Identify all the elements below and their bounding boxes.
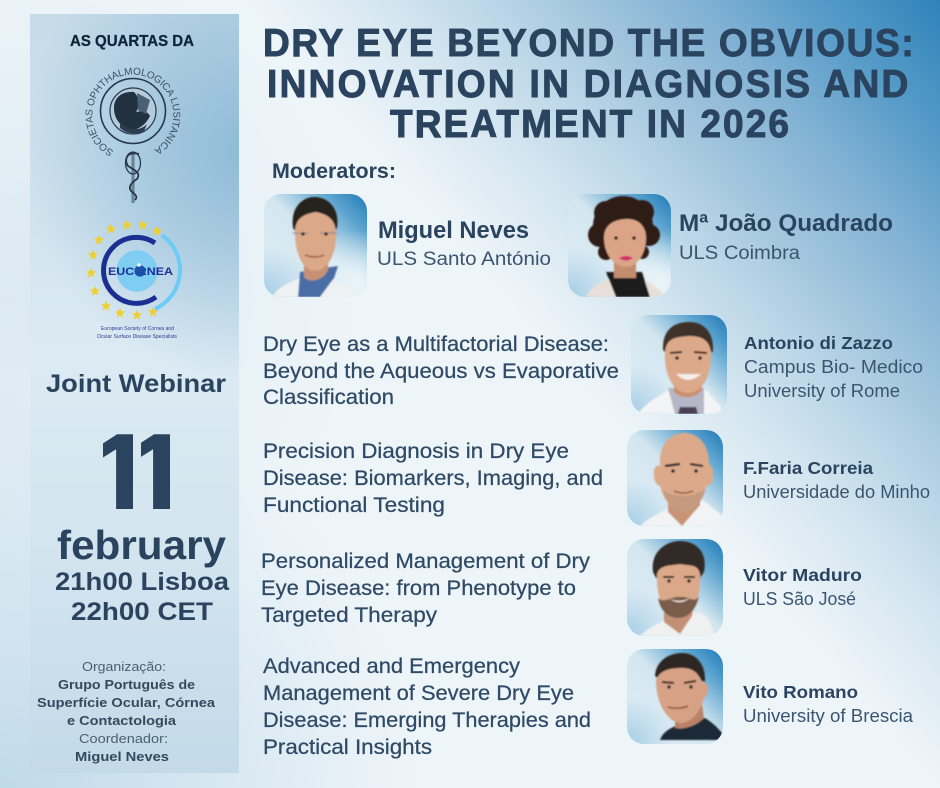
- photo: F. Faria Correia: [627, 430, 731, 526]
- affiliation: Campus Bio- Medico: [744, 357, 923, 377]
- affiliation: ULS Santo António: [377, 249, 551, 270]
- organisers block: Superfície Ocular, Córnea: [37, 695, 216, 710]
- talk 1 topic: [263, 332, 619, 409]
- talk 3 topic: [261, 549, 590, 627]
- title: [263, 22, 914, 146]
- logo: EuCornea: Ocular Surface Disease Specialists: [97, 334, 177, 340]
- talk 4 topic: Advanced and Emergency: [263, 654, 520, 678]
- speaker: Vito Romano: [627, 649, 914, 744]
- organisers block: Grupo Português de: [58, 677, 195, 692]
- name: Mª João Quadrado: [679, 210, 893, 237]
- photo: Vitor Maduro: [627, 539, 723, 636]
- talk 3 topic: Eye Disease: from Phenotype to: [261, 576, 576, 600]
- photo: Antonio di Zazzo: [631, 315, 727, 414]
- photo: Maria João Quadrado: [568, 194, 671, 297]
- talk 2 topic: Disease: Biomarkers, Imaging, and: [263, 466, 603, 490]
- logo: EuCornea: [86, 220, 180, 340]
- talk 4 topic: Management of Severe Dry Eye: [263, 681, 574, 705]
- title: TREATMENT IN 2026: [390, 103, 789, 146]
- title: DRY EYE BEYOND THE OBVIOUS:: [263, 22, 914, 65]
- heading: moderators: Moderators:: [272, 159, 396, 183]
- talk 1 topic: Classification: [263, 385, 394, 409]
- talk 4 topic: [263, 654, 591, 759]
- affiliation: University of Rome: [744, 381, 900, 401]
- affiliation: ULS São José: [743, 589, 856, 609]
- title: INNOVATION IN DIAGNOSIS AND: [267, 63, 908, 106]
- name: Vito Romano: [743, 682, 858, 702]
- talk 3 topic: Personalized Management of Dry: [261, 549, 590, 573]
- moderator: Miguel Neves: [264, 194, 551, 297]
- label: joint webinar: Joint Webinar: [46, 370, 226, 398]
- logo: EuCornea: EUC RNEA: [108, 266, 173, 278]
- talk 4 topic: Practical Insights: [263, 735, 432, 759]
- organisers block: Coordenador:: [79, 731, 168, 746]
- name: Antonio di Zazzo: [744, 333, 893, 353]
- organisers block: e Contactologia: [67, 713, 177, 728]
- name: Miguel Neves: [378, 217, 529, 244]
- time: Lisbon: 21h00 Lisboa: [55, 568, 230, 596]
- date: month: february: [57, 522, 226, 568]
- logo: Societas Ophthalmologica Lusitanica: [86, 68, 180, 203]
- talk 2 topic: [263, 439, 603, 517]
- speaker: F. Faria Correia: [627, 430, 930, 526]
- affiliation: ULS Coimbra: [679, 243, 800, 264]
- talk 4 topic: Disease: Emerging Therapies and: [263, 708, 591, 732]
- talk 3 topic: Targeted Therapy: [261, 603, 437, 627]
- name: Vitor Maduro: [743, 565, 862, 585]
- organisers block: Miguel Neves: [75, 749, 169, 764]
- date: day number: 1: [123, 407, 195, 551]
- speaker: Antonio di Zazzo: [631, 315, 923, 414]
- date: day number: [103, 434, 170, 509]
- organisers block: [37, 659, 216, 764]
- organisers block: Organização:: [82, 659, 166, 674]
- time: CET: 22h00 CET: [71, 598, 213, 626]
- affiliation: [744, 357, 923, 401]
- speaker: Vitor Maduro: [627, 539, 862, 636]
- photo: Vito Romano: [627, 649, 727, 744]
- logo: EuCornea: European Society of Cornea and: [101, 326, 174, 332]
- date: day number: 1: [86, 407, 158, 551]
- talk 1 topic: Dry Eye as a Multifactorial Disease:: [263, 332, 609, 356]
- panel: left sidebar: [30, 14, 239, 773]
- talk 1 topic: Beyond the Aqueous vs Evaporative: [263, 359, 619, 383]
- moderator: Maria João Quadrado: [568, 194, 893, 297]
- logo: Societas Ophthalmologica Lusitanica: SOCIETAS OPHTHALMOLOGICA LUSITANICA: [86, 68, 180, 156]
- photo: Miguel Neves: [264, 194, 367, 297]
- affiliation: University of Brescia: [743, 706, 914, 726]
- talk 2 topic: Functional Testing: [263, 493, 445, 517]
- name: F.Faria Correia: [743, 458, 873, 478]
- affiliation: Universidade do Minho: [743, 482, 930, 502]
- talk 2 topic: Precision Diagnosis in Dry Eye: [263, 439, 569, 463]
- heading: as quartas da: AS QUARTAS DA: [70, 33, 194, 50]
